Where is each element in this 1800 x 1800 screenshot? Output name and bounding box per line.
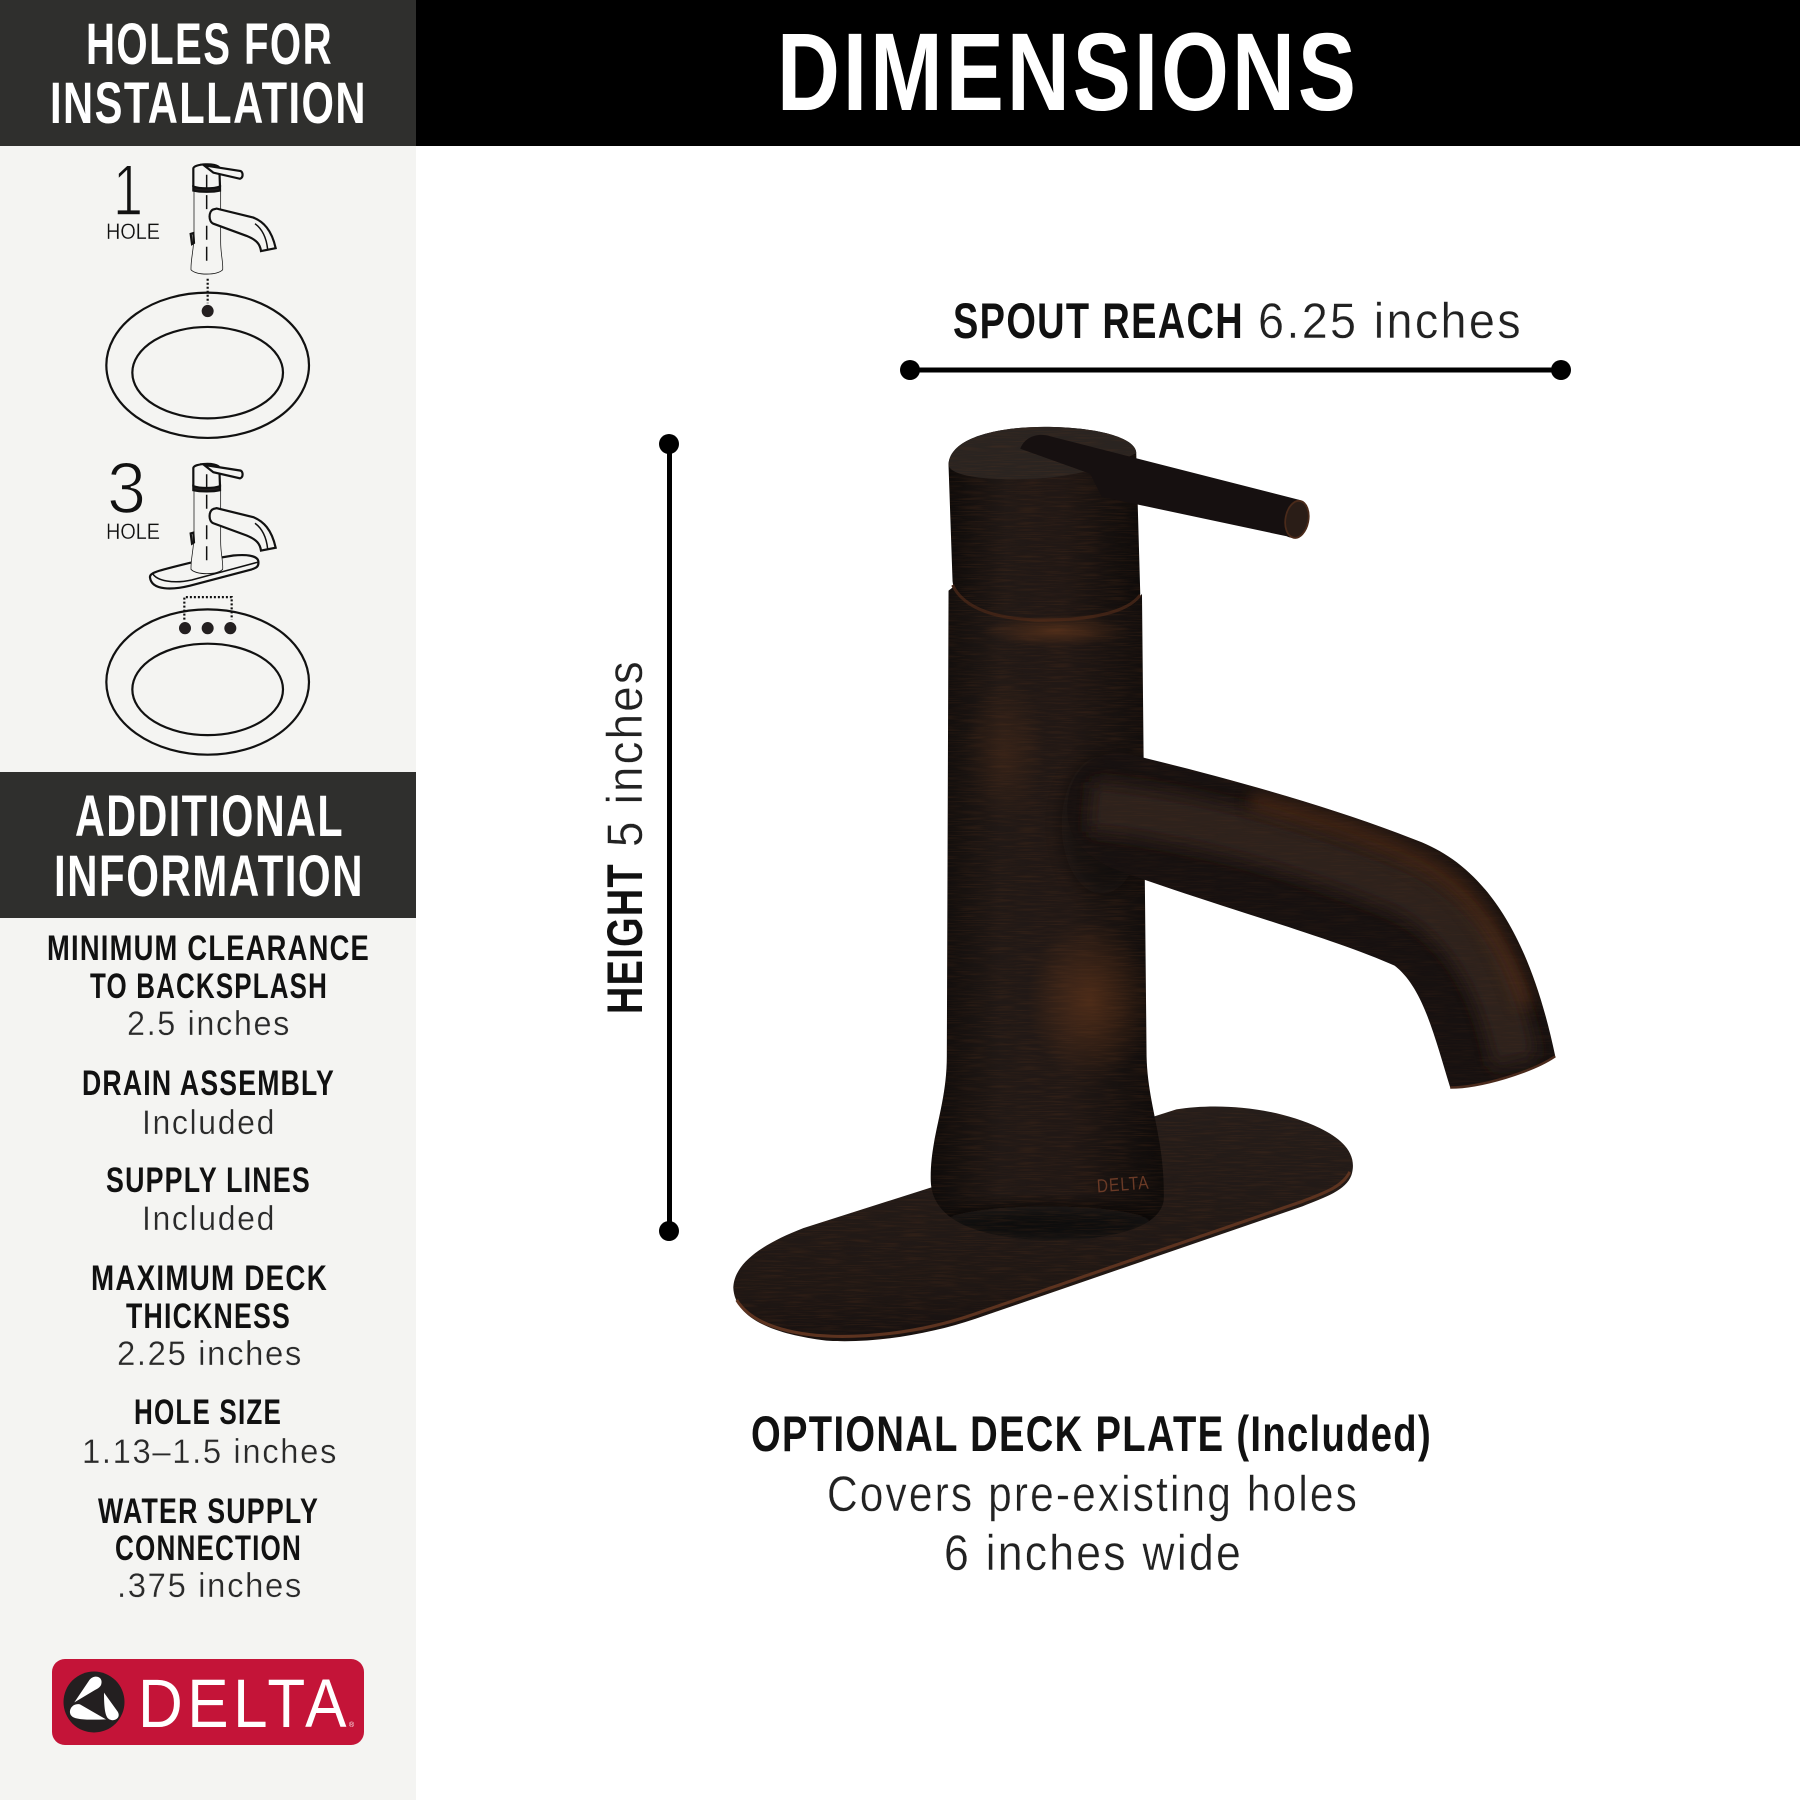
panel: left sidebar background [0, 0, 416, 1800]
logo: delta: ® [349, 1721, 355, 1729]
caption: optional deck plate: OPTIONAL DECK PLATE (Included) [751, 1406, 1432, 1462]
spec: water supply connection: .375 inches [117, 1567, 303, 1605]
heading: additional information: ADDITIONAL [75, 784, 344, 849]
dimension line: spout reach [900, 360, 1571, 380]
copper finish highlights [734, 428, 1556, 1341]
spec: drain assembly: DRAIN ASSEMBLY [82, 1064, 335, 1103]
faucet body [931, 588, 1164, 1244]
caption: optional deck plate [751, 1406, 1432, 1581]
label: spout reach [953, 293, 1523, 349]
label: height: 5 inches [597, 659, 653, 847]
spec: maximum deck thickness: MAXIMUM DECK [91, 1259, 328, 1298]
shadow under spout on body [1060, 758, 1119, 888]
lever [1020, 435, 1312, 540]
spec: minimum clearance [47, 929, 370, 1043]
heading: additional information: INFORMATION [54, 844, 364, 909]
logo: delta: DELTA [138, 1665, 351, 1742]
diagram: three hole installation [106, 449, 309, 755]
title banner: dimensions: DIMENSIONS [777, 11, 1359, 134]
spec: drain assembly: Included [142, 1104, 276, 1142]
label: spout reach: 6.25 inches [1258, 293, 1523, 349]
title banner: dimensions [416, 0, 1800, 146]
logo: delta [52, 1659, 364, 1745]
label: height [597, 659, 653, 1014]
diagram: three hole installation: 3 [107, 449, 146, 529]
diagram: one hole installation: HOLE [106, 219, 160, 244]
deck plate [733, 1107, 1353, 1341]
faucet handle knob [949, 427, 1140, 620]
spec: minimum clearance: TO BACKSPLASH [90, 967, 328, 1006]
dimension line: height [659, 434, 679, 1241]
diagram: one hole installation: 1 [113, 151, 143, 231]
product logo mark: DELTA [1096, 1172, 1150, 1197]
spec: maximum deck thickness [91, 1259, 328, 1373]
label: height: HEIGHT [597, 863, 653, 1014]
label: spout reach: SPOUT REACH [953, 293, 1244, 349]
caption: optional deck plate: 6 inches wide [944, 1525, 1243, 1581]
spec: supply lines: SUPPLY LINES [106, 1161, 311, 1200]
heading: holes for installation: HOLES FOR [86, 12, 333, 77]
product photo: faucet with deck plate [733, 426, 1556, 1342]
spec: water supply connection: CONNECTION [115, 1529, 302, 1568]
spec: maximum deck thickness: 2.25 inches [117, 1335, 303, 1373]
spec: hole size: HOLE SIZE [134, 1393, 282, 1432]
heading: holes for installation: INSTALLATION [50, 71, 367, 136]
diagram: three hole installation: HOLE [106, 519, 160, 544]
diagram: one hole installation [106, 151, 309, 438]
spec: water supply connection: WATER SUPPLY [98, 1492, 319, 1531]
spec: hole size [82, 1393, 338, 1471]
heading: holes for installation [0, 0, 416, 146]
spec: supply lines: Included [142, 1200, 276, 1238]
spec: maximum deck thickness: THICKNESS [126, 1297, 291, 1336]
spec: water supply connection [98, 1492, 319, 1605]
spec: hole size: 1.13–1.5 inches [82, 1433, 338, 1471]
spout [1084, 758, 1556, 1089]
spec: minimum clearance: MINIMUM CLEARANCE [47, 929, 370, 968]
spec: drain assembly [82, 1064, 335, 1142]
knob top [949, 427, 1136, 479]
heading: additional information [0, 772, 416, 918]
caption: optional deck plate: Covers pre-existing holes [827, 1466, 1359, 1522]
spec: supply lines [106, 1161, 311, 1238]
spec: minimum clearance: 2.5 inches [127, 1005, 291, 1043]
